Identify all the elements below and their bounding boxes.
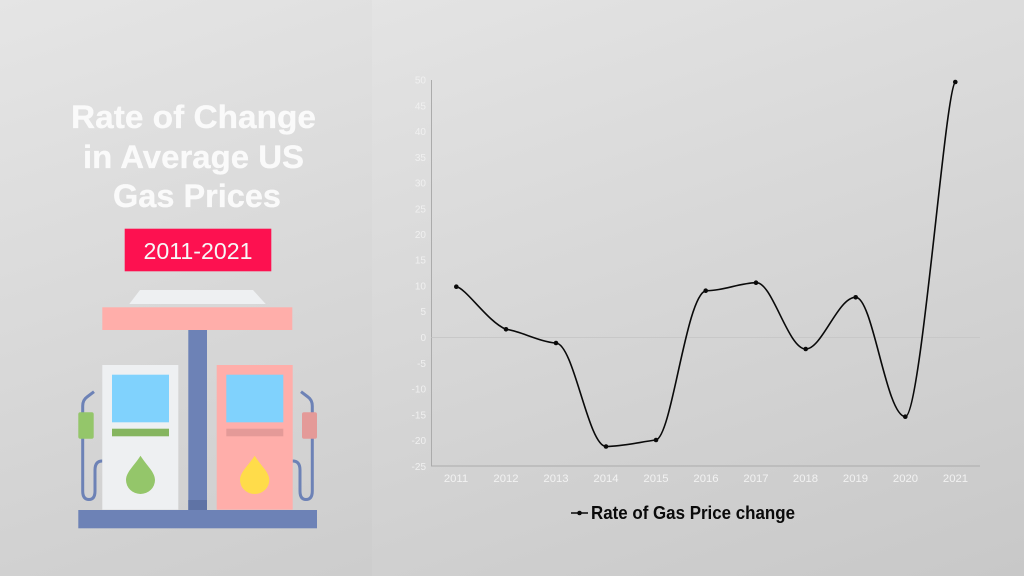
left pump bbox=[102, 365, 178, 510]
y axis labels: 45 bbox=[415, 102, 426, 112]
x axis labels: 2017 bbox=[743, 473, 769, 485]
y axis labels: 10 bbox=[415, 282, 426, 292]
x axis labels: 2011 bbox=[444, 473, 468, 485]
x axis labels: 2012 bbox=[493, 473, 519, 485]
date badge: 2011-2021 bbox=[144, 238, 252, 264]
x axis labels: 2021 bbox=[943, 473, 968, 485]
canopy top bbox=[129, 290, 266, 304]
left hose bbox=[83, 392, 102, 500]
x axis labels: 2015 bbox=[643, 473, 669, 485]
line chart bbox=[412, 76, 980, 523]
y axis labels: 40 bbox=[415, 127, 426, 138]
y axis labels: -10 bbox=[412, 384, 426, 396]
x axis labels: 2019 bbox=[843, 473, 868, 485]
title bbox=[71, 99, 316, 214]
left nozzle bbox=[78, 412, 94, 439]
canopy bbox=[102, 307, 292, 330]
y axis labels bbox=[412, 76, 426, 473]
x axis labels bbox=[444, 473, 968, 485]
right nozzle bbox=[302, 412, 317, 439]
title: Rate of Change bbox=[71, 99, 316, 135]
x axis labels: 2020 bbox=[893, 473, 918, 485]
y axis labels: 50 bbox=[415, 76, 426, 86]
x axis labels: 2018 bbox=[793, 473, 818, 485]
date badge bbox=[125, 229, 271, 271]
y axis labels: 30 bbox=[415, 178, 426, 190]
y axis labels: 5 bbox=[420, 307, 426, 318]
y axis labels: 25 bbox=[415, 204, 426, 216]
y axis labels: 15 bbox=[415, 256, 426, 266]
axes bbox=[432, 80, 980, 466]
y axis labels: -5 bbox=[417, 359, 426, 370]
data line bbox=[456, 82, 955, 446]
central post bbox=[188, 330, 207, 510]
y axis labels: 0 bbox=[420, 333, 426, 344]
y axis labels: -15 bbox=[412, 410, 426, 422]
y axis labels: -20 bbox=[412, 436, 426, 447]
title: in Average US bbox=[83, 139, 304, 175]
y axis labels: 20 bbox=[415, 230, 426, 241]
title: Gas Prices bbox=[113, 178, 281, 214]
right hose bbox=[293, 392, 312, 500]
x axis labels: 2014 bbox=[593, 473, 619, 485]
x axis labels: 2013 bbox=[543, 473, 569, 485]
data points bbox=[454, 80, 958, 449]
y axis labels: 35 bbox=[415, 153, 426, 164]
y axis labels: -25 bbox=[412, 462, 426, 473]
icon: gas station bbox=[78, 290, 317, 528]
x axis labels: 2016 bbox=[693, 473, 719, 485]
right pump bbox=[217, 365, 293, 510]
legend: Rate of Gas Price change bbox=[591, 503, 795, 523]
panel: left background bbox=[0, 0, 372, 576]
zero line bbox=[432, 336, 980, 338]
base bbox=[78, 510, 317, 528]
